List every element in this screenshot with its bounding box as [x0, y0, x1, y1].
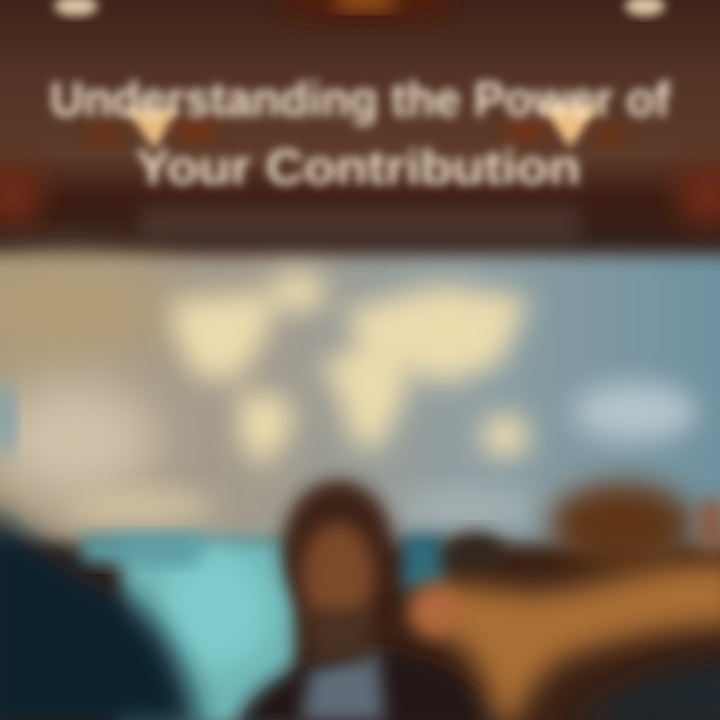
top brown wall — [0, 0, 720, 250]
foreground dark silhouette left — [0, 505, 200, 720]
title — [50, 73, 671, 195]
world map panel — [0, 254, 720, 544]
map continents — [170, 272, 530, 470]
central presenter — [235, 480, 510, 720]
ceiling emblem and lights — [54, 0, 665, 150]
title: Your Contribution — [136, 141, 580, 195]
audience member right — [409, 483, 720, 720]
title: Understanding the Power of — [50, 73, 671, 127]
teal lower wall — [80, 535, 445, 720]
